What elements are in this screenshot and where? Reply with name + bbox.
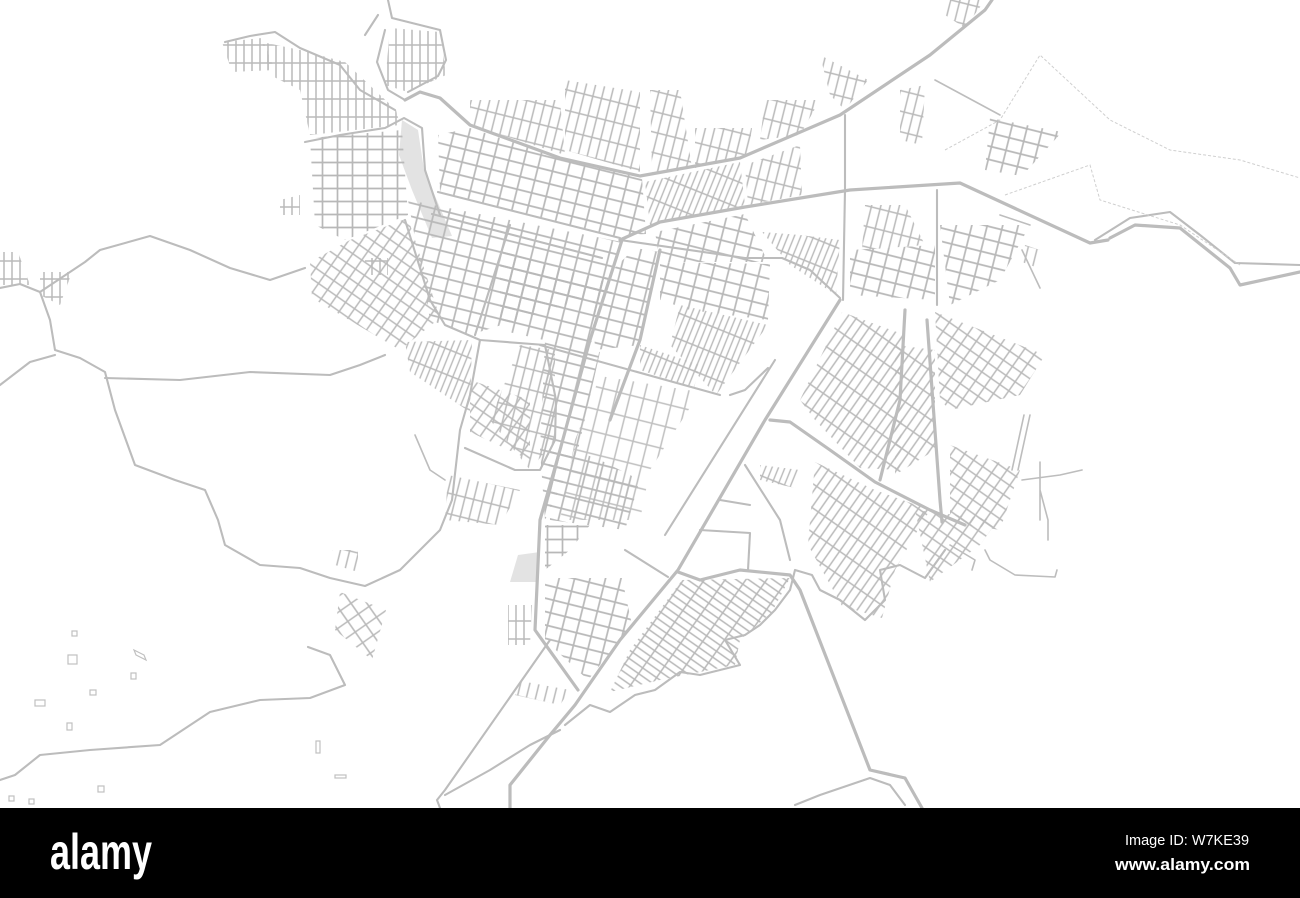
website: www.alamy.com	[1114, 855, 1250, 874]
district: north spokes	[470, 0, 985, 172]
district: central east	[640, 118, 1062, 395]
image id: Image ID: W7KE39	[1125, 832, 1249, 849]
green areas	[399, 120, 540, 582]
small isolated blocks	[9, 631, 346, 804]
dotted trails	[945, 55, 1300, 265]
logo: alamy: alamy	[50, 824, 152, 880]
district: west	[0, 218, 530, 660]
district: south-east	[808, 462, 998, 618]
district: city centre	[408, 128, 660, 520]
district: southern neighbourhoods	[508, 376, 790, 705]
footer bar	[0, 808, 1300, 898]
district: eastern neighbourhoods	[760, 312, 1045, 530]
street blocks	[0, 0, 1062, 705]
district: north-west	[222, 28, 446, 240]
